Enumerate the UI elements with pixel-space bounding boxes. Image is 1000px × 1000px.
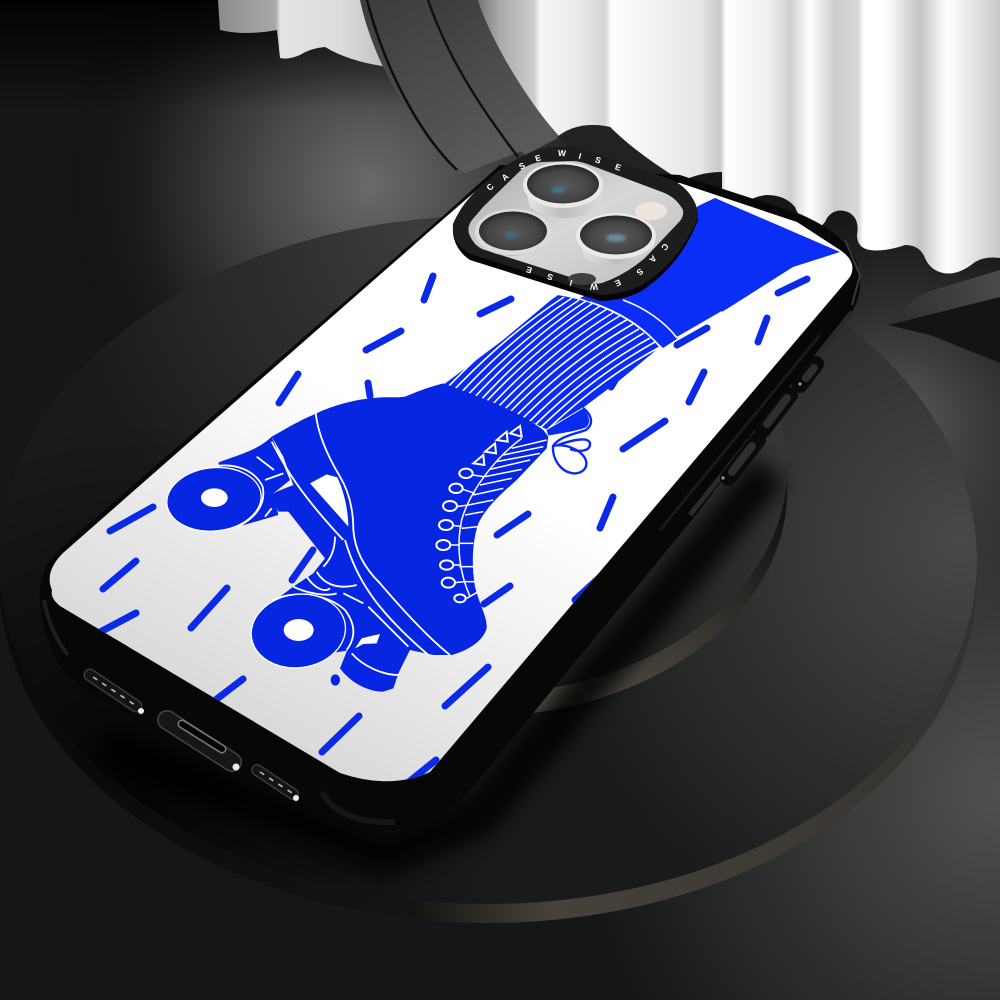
dashes: [85, 276, 807, 785]
solid band lower line: [677, 312, 722, 338]
phone shadow: [100, 470, 770, 855]
boot white lines: [217, 413, 450, 675]
right stand: [888, 270, 1000, 363]
toe notch gap: [355, 634, 380, 648]
brand text bottom: E: [613, 277, 623, 289]
brand text top: E: [614, 161, 623, 173]
lacing: [450, 438, 547, 598]
sock solid band: [580, 198, 840, 348]
lens top: [523, 162, 603, 218]
camera bumper: [453, 147, 698, 301]
sock band line: [623, 300, 677, 338]
brand text bottom: W: [589, 282, 598, 292]
sock ribs: [447, 295, 660, 431]
bumper side: [453, 149, 698, 301]
dark arc stand: [360, 0, 680, 180]
brand text bottom: I: [569, 278, 573, 288]
phone case: [40, 165, 860, 830]
brand text bottom: [525, 241, 671, 292]
boot silhouette: [271, 383, 548, 692]
brand text top: I: [578, 151, 582, 161]
lens right: [576, 213, 656, 265]
brand text top: [484, 148, 623, 193]
brand text bottom: A: [647, 253, 659, 265]
microphone: [568, 273, 596, 285]
brand text top: A: [499, 171, 511, 183]
brand text bottom: C: [659, 241, 671, 253]
white triangle gap: [310, 474, 348, 527]
rear truck: [218, 437, 290, 527]
brand text bottom: S: [546, 271, 554, 283]
curtain left: [218, 0, 392, 67]
brand text top: E: [534, 152, 543, 164]
speaker grille right: [257, 770, 299, 801]
brand text top: C: [484, 181, 496, 193]
lens left: [475, 209, 551, 256]
brand text bottom: E: [525, 264, 533, 276]
brand text top: S: [517, 160, 527, 172]
bumper face: [453, 147, 698, 295]
platform small disc: [534, 482, 787, 713]
speaker grille left: [90, 675, 144, 714]
rear wheel: [166, 466, 262, 532]
lace bow: [553, 408, 591, 473]
brand text top: S: [594, 154, 603, 166]
charging port: [167, 720, 240, 770]
sock ribbed: [443, 295, 660, 430]
eyelets: [436, 426, 522, 602]
toe dot: [331, 674, 340, 686]
roller skate in local coordinates: [164, 383, 548, 692]
case body: [40, 165, 860, 830]
curtain right: [478, 0, 1000, 274]
front truck fill: [292, 573, 360, 652]
platform large disc: [0, 216, 977, 923]
case gloss: [322, 792, 395, 822]
front wheel: [250, 593, 346, 668]
side buttons: [721, 364, 816, 480]
brand text top: W: [558, 148, 567, 158]
tongue loop: [546, 408, 590, 436]
artwork: [85, 198, 840, 785]
camera glass: [468, 161, 683, 284]
brand text bottom: S: [634, 266, 645, 278]
screen: [50, 170, 852, 781]
flash: [635, 202, 667, 220]
